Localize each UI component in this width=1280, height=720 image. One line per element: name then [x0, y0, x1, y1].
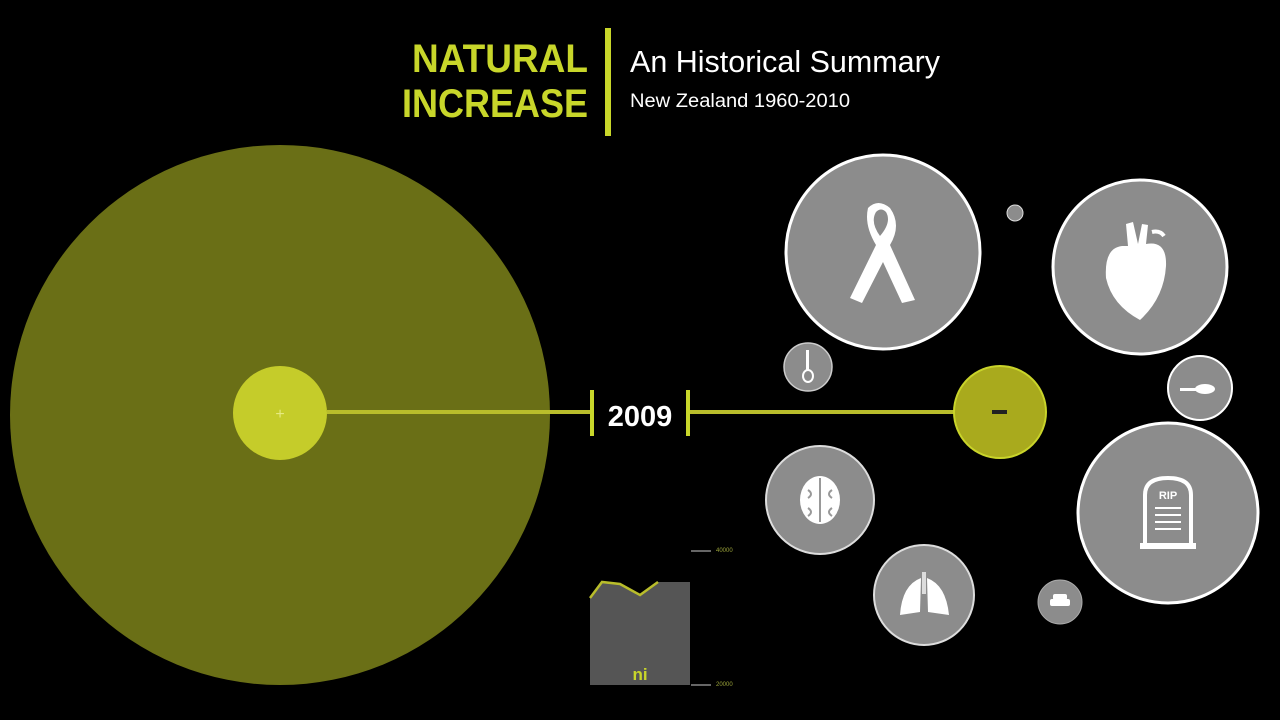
year label: 2009	[608, 401, 672, 433]
title	[402, 28, 940, 136]
title: New Zealand 1960-2010	[630, 91, 850, 112]
minus circle	[954, 366, 1046, 458]
area chart: ni: 40000	[716, 548, 733, 554]
icon: cancer ribbon	[786, 155, 980, 349]
title: An Historical Summary	[630, 44, 940, 79]
icon: tiny circle	[1007, 205, 1023, 221]
title: INCREASE	[402, 82, 588, 126]
icon: noose	[784, 343, 832, 391]
icon: spoon	[1168, 356, 1232, 420]
area chart: ni: ni	[632, 665, 648, 684]
area chart: ni: 20000	[716, 682, 733, 688]
plus circle: +	[275, 406, 285, 423]
year label	[590, 390, 690, 436]
big births circle	[10, 145, 550, 685]
area chart: ni	[590, 548, 733, 688]
timeline line	[327, 410, 955, 414]
icon: gravestone RIP	[1078, 423, 1258, 603]
icon: gravestone RIP: RIP	[1159, 490, 1177, 502]
icon: lungs	[874, 545, 974, 645]
icon: brain	[766, 446, 874, 554]
plus circle	[233, 366, 327, 460]
title: NATURAL	[412, 37, 588, 81]
icon: heart	[1053, 180, 1227, 354]
icon: car	[1038, 580, 1082, 624]
